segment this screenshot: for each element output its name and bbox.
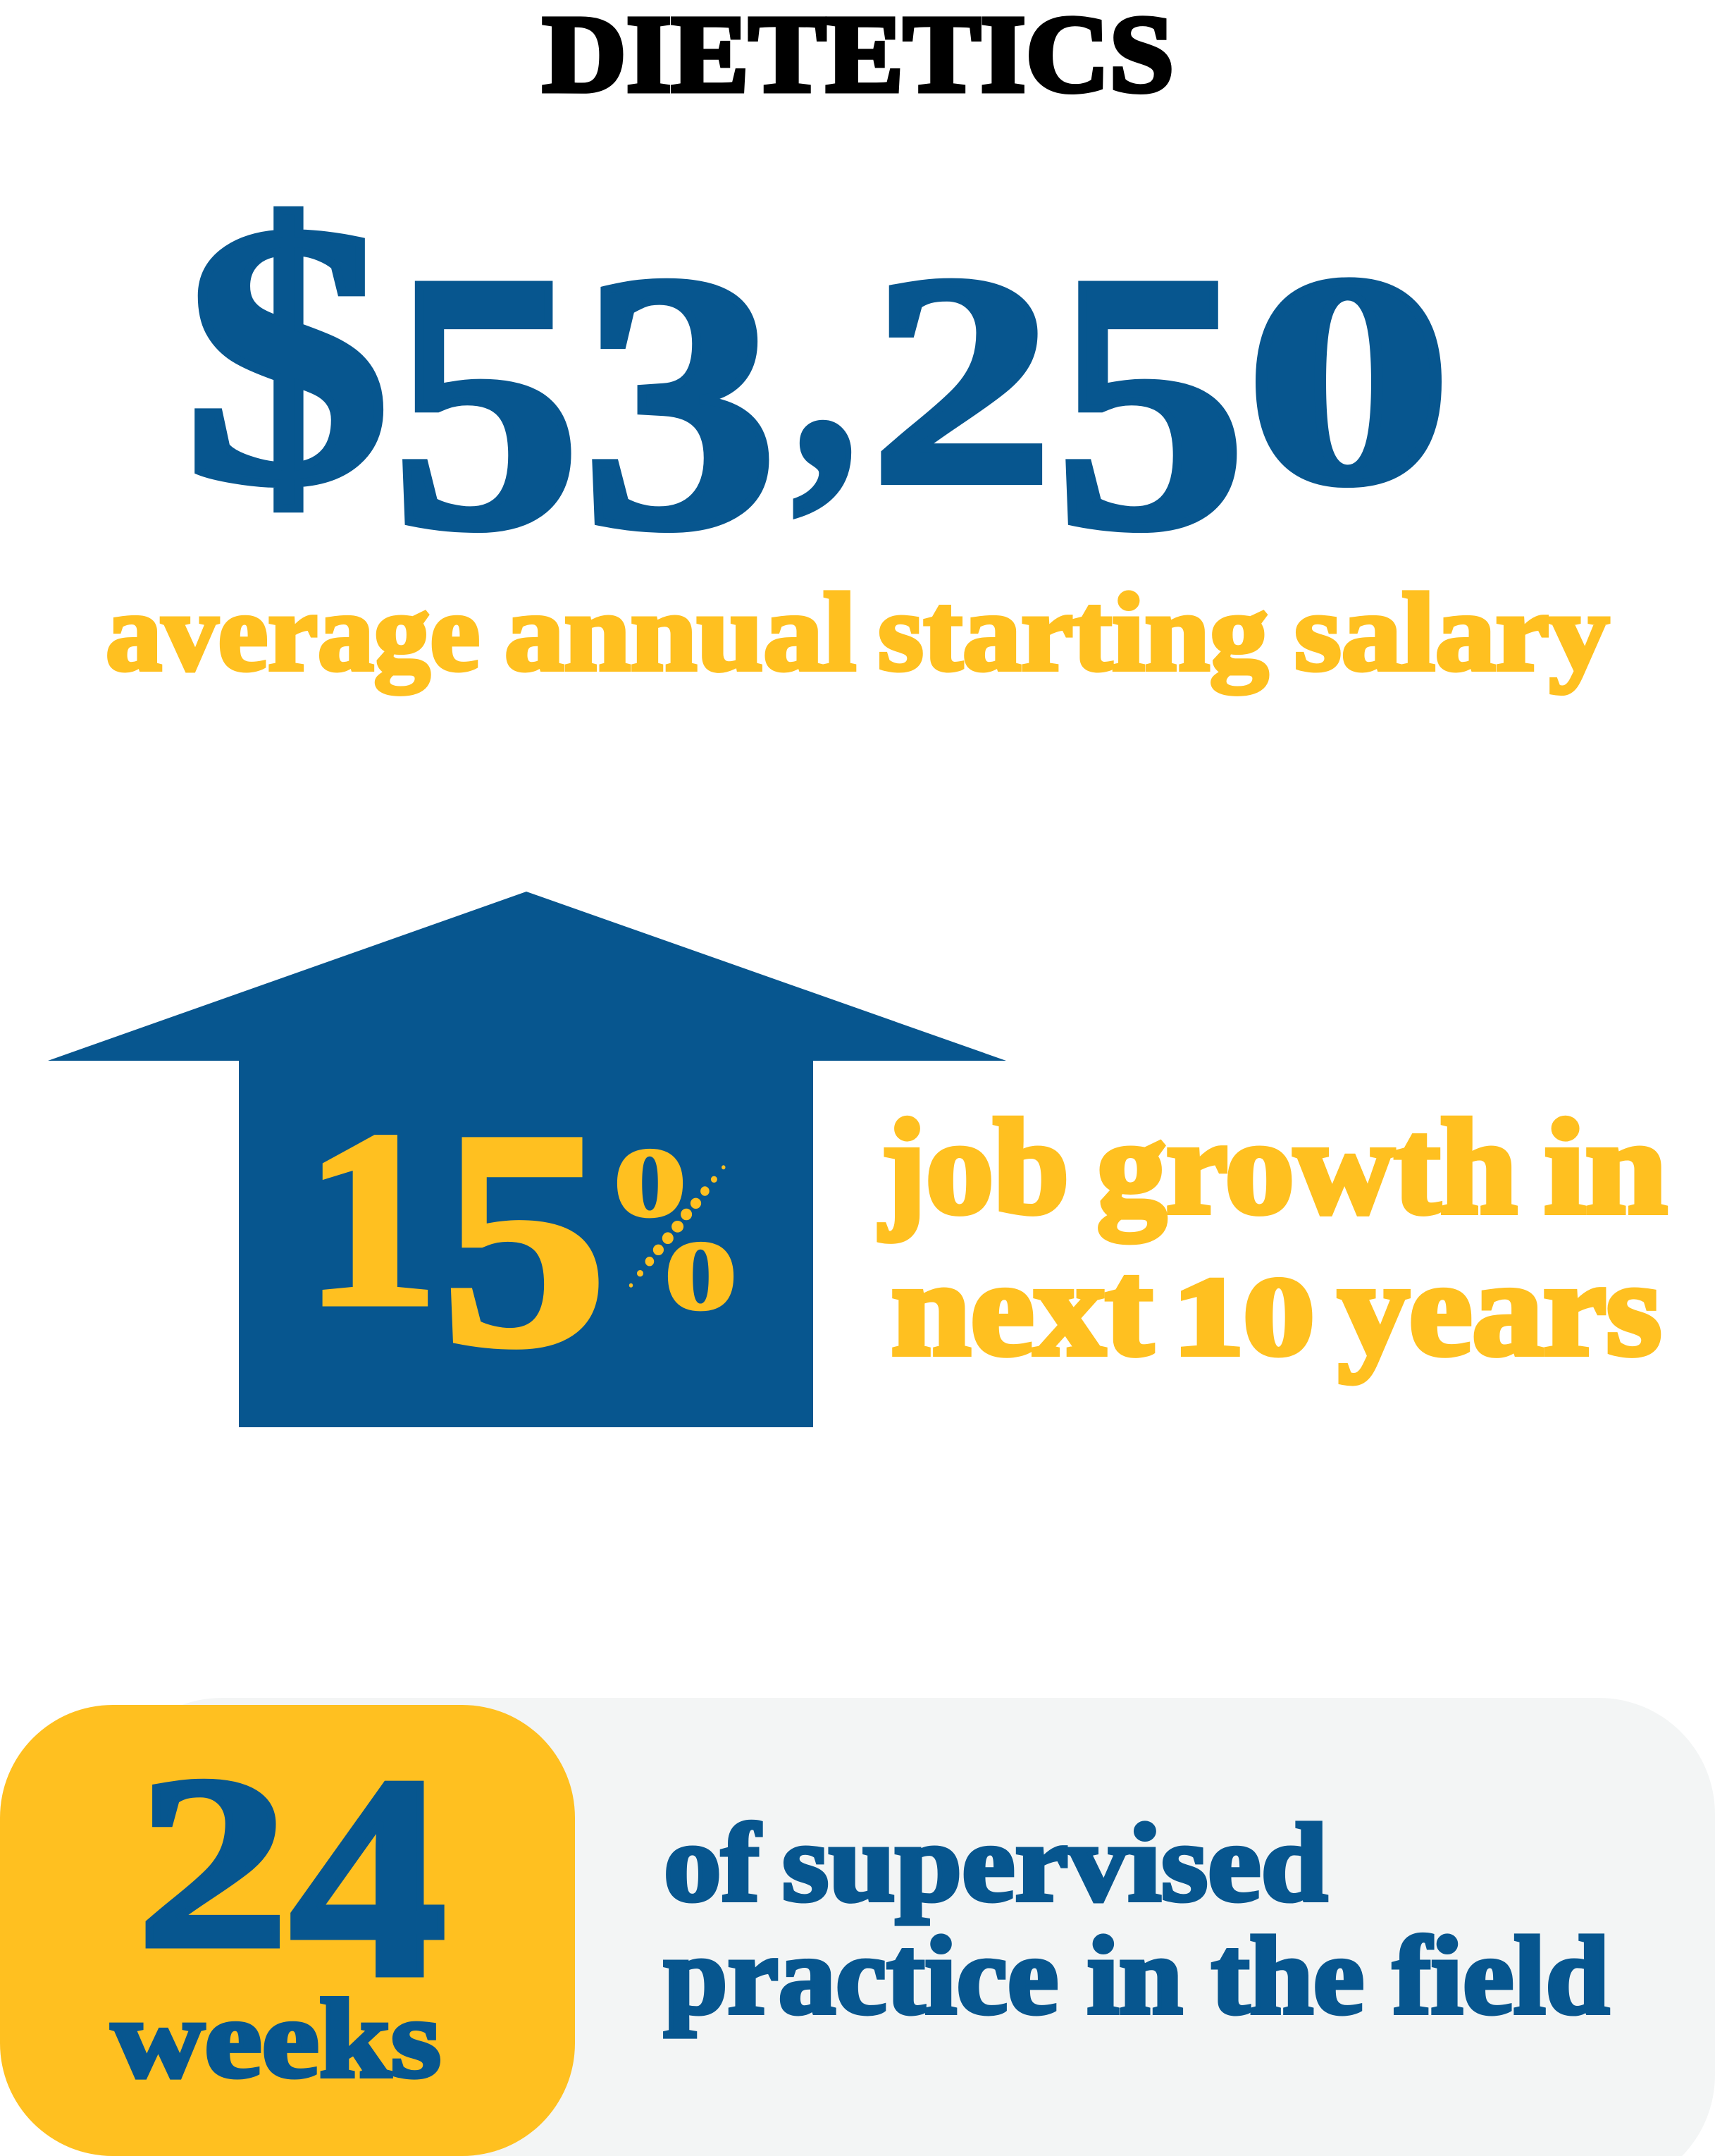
weeks figure (111, 1717, 447, 2101)
percent sign: 0 (614, 1128, 686, 1238)
growth caption (879, 1092, 1667, 1384)
panel: job growth (48, 892, 1667, 1427)
percent sign (614, 1128, 737, 1331)
salary caption: salary (1294, 571, 1609, 694)
growth caption: 10 (1173, 1255, 1314, 1379)
growth caption: growth (1097, 1092, 1517, 1243)
panel: supervised practice (0, 1698, 1715, 2156)
salary figure: 5 (392, 199, 581, 605)
salary figure: 5 (1055, 199, 1246, 605)
growth caption: next (891, 1233, 1153, 1384)
salary figure: 2 (871, 214, 1053, 546)
weeks figure: 2 (137, 1725, 289, 1999)
practice caption (664, 1801, 1609, 2038)
icon: up arrow (48, 892, 1006, 1427)
salary caption: annual (504, 571, 856, 694)
salary figure: 0 (1246, 214, 1451, 546)
growth caption: years (1338, 1233, 1661, 1384)
salary figure: $ (185, 149, 390, 561)
grey background panel (106, 1698, 1715, 2156)
salary figure: 3 (582, 199, 778, 605)
practice caption: practice in the field (664, 1914, 1609, 2038)
panel: salary (106, 149, 1609, 694)
growth caption: job (879, 1092, 1069, 1242)
yellow badge (0, 1705, 575, 2156)
salary figure: , (793, 199, 858, 534)
growth figure (304, 1068, 737, 1411)
practice caption: of (664, 1801, 761, 1925)
growth figure: 1 (304, 1080, 438, 1357)
salary caption (106, 571, 1609, 694)
salary caption: average (106, 571, 480, 694)
growth caption: in (1544, 1092, 1667, 1242)
practice caption: supervised (782, 1801, 1327, 1925)
salary caption: starting (878, 571, 1268, 694)
salary figure (185, 149, 1451, 605)
weeks figure: weeks (111, 1976, 441, 2101)
weeks figure: 4 (290, 1717, 447, 2037)
percent sign: 0 (664, 1221, 737, 1331)
growth figure: 5 (441, 1068, 607, 1411)
